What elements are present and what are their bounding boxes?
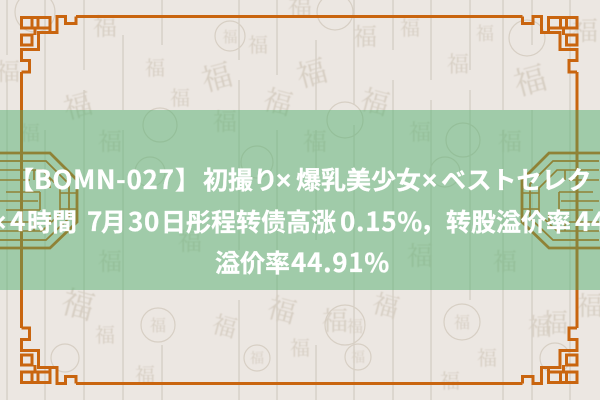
background: paper with faint vertical lines and fortune characters: 福: [260, 78, 297, 124]
background: paper with faint vertical lines and fortune characters: 福: [145, 52, 165, 81]
title text: ベストセレク: [441, 161, 592, 197]
title text: 7: [87, 202, 103, 239]
title text: 溢价率: [215, 244, 290, 280]
background: paper with faint vertical lines and fortune characters: 福: [264, 286, 301, 332]
background: paper with faint vertical lines and fortune characters: 福: [250, 348, 264, 368]
title text: 4: [10, 202, 26, 239]
background: paper with faint vertical lines and fortune characters: 福: [508, 53, 551, 105]
background: paper with faint vertical lines and fortune characters: 福: [322, 301, 348, 338]
background: paper with faint vertical lines and fortune characters: 福: [222, 26, 238, 47]
green translucent title band: [0, 110, 600, 290]
corner ornament: top left: [22, 16, 76, 72]
background: paper with faint vertical lines and fortune characters: 福: [303, 122, 327, 157]
title text: 時間: [27, 203, 77, 239]
title text: BOMN-027: [34, 160, 175, 197]
background: paper with faint vertical lines and fortune characters: 福: [369, 283, 403, 326]
background: paper with faint vertical lines and fortune characters: 福: [150, 313, 166, 336]
background: paper with faint vertical lines and fortune characters: 福: [572, 11, 598, 48]
title text: 44.91%: [291, 243, 390, 280]
background: paper with faint vertical lines and fortune characters: 福: [178, 222, 202, 257]
title text: ×: [422, 165, 437, 195]
background: paper with faint vertical lines and fortune characters: 福: [93, 7, 117, 42]
background: paper with faint vertical lines and fortune characters: 福: [454, 310, 470, 333]
background: paper with faint vertical lines and fortune characters: 福: [477, 342, 497, 371]
background: paper with faint vertical lines and fortune characters: 福: [196, 50, 236, 100]
background: paper with faint vertical lines and fortune characters: 福: [98, 122, 122, 157]
background: paper with faint vertical lines and fortune characters: 福: [351, 347, 365, 367]
title text: ，: [420, 203, 445, 239]
title text: 日彤程转债高涨: [161, 203, 336, 239]
background: paper with faint vertical lines and fortune characters: 福: [357, 78, 394, 124]
title text: 0.15%: [340, 202, 423, 239]
background: paper with faint vertical lines and fortune characters: 福: [528, 307, 552, 342]
background: paper with faint vertical lines and fortune characters: 福: [407, 236, 433, 273]
background: paper with faint vertical lines and fortune characters: 福: [353, 17, 377, 52]
corner ornament: top right: [522, 16, 577, 72]
background: paper with faint vertical lines and fortune characters: 福: [209, 305, 241, 345]
background: paper with faint vertical lines and fortune characters: 福: [447, 48, 469, 79]
background: paper with faint vertical lines and fortune characters: 福: [476, 20, 494, 46]
background: paper with faint vertical lines and fortune characters: 福: [59, 82, 96, 128]
background: paper with faint vertical lines and fortune characters: 福: [170, 82, 190, 111]
background: paper with faint vertical lines and fortune characters: 福: [498, 122, 522, 157]
title text: 月: [101, 203, 126, 239]
frame lines seen through the band: [22, 110, 577, 290]
background: paper with faint vertical lines and fortune characters: 福: [98, 242, 122, 277]
background: paper with faint vertical lines and fortune characters: 福: [409, 116, 431, 147]
background: paper with faint vertical lines and fortune characters: 福: [347, 314, 363, 337]
background: paper with faint vertical lines and fortune characters: 福: [400, 12, 420, 41]
background: paper with faint vertical lines and fortune characters: 福: [57, 277, 100, 329]
background: paper with faint vertical lines and fortune characters: 福: [135, 359, 155, 388]
corner ornament: bottom left: [22, 328, 76, 384]
background: paper with faint vertical lines and fortune characters: 福: [95, 319, 115, 348]
title text: 【: [9, 161, 34, 197]
title text: [0, 160, 600, 280]
background: paper with faint vertical lines and fortune characters: 福: [20, 117, 40, 146]
left octagonal lattice ornament: [0, 153, 77, 248]
background: paper with faint vertical lines and fortune characters: 福: [291, 46, 331, 96]
right octagonal lattice ornament: [522, 153, 600, 248]
background: paper with faint vertical lines and fortune characters: 福: [493, 242, 517, 277]
background: paper with faint vertical lines and fortune characters: 福: [542, 303, 568, 340]
title text: 30: [128, 202, 160, 239]
title text: 爆乳美少女: [296, 161, 421, 197]
background: paper with faint vertical lines and fortune characters: 福: [213, 102, 237, 137]
background: paper with faint vertical lines and fortune characters: 福: [440, 365, 460, 394]
corner ornament: bottom right: [522, 328, 577, 384]
title text: 初撮り: [203, 161, 278, 197]
background: paper with faint vertical lines and fortune characters: 福: [290, 332, 310, 361]
title text: 转股溢价率: [446, 203, 571, 239]
background: paper with faint vertical lines and fortune characters: 福: [248, 29, 268, 58]
title text: ×: [276, 165, 291, 195]
title text: 】: [175, 161, 200, 197]
